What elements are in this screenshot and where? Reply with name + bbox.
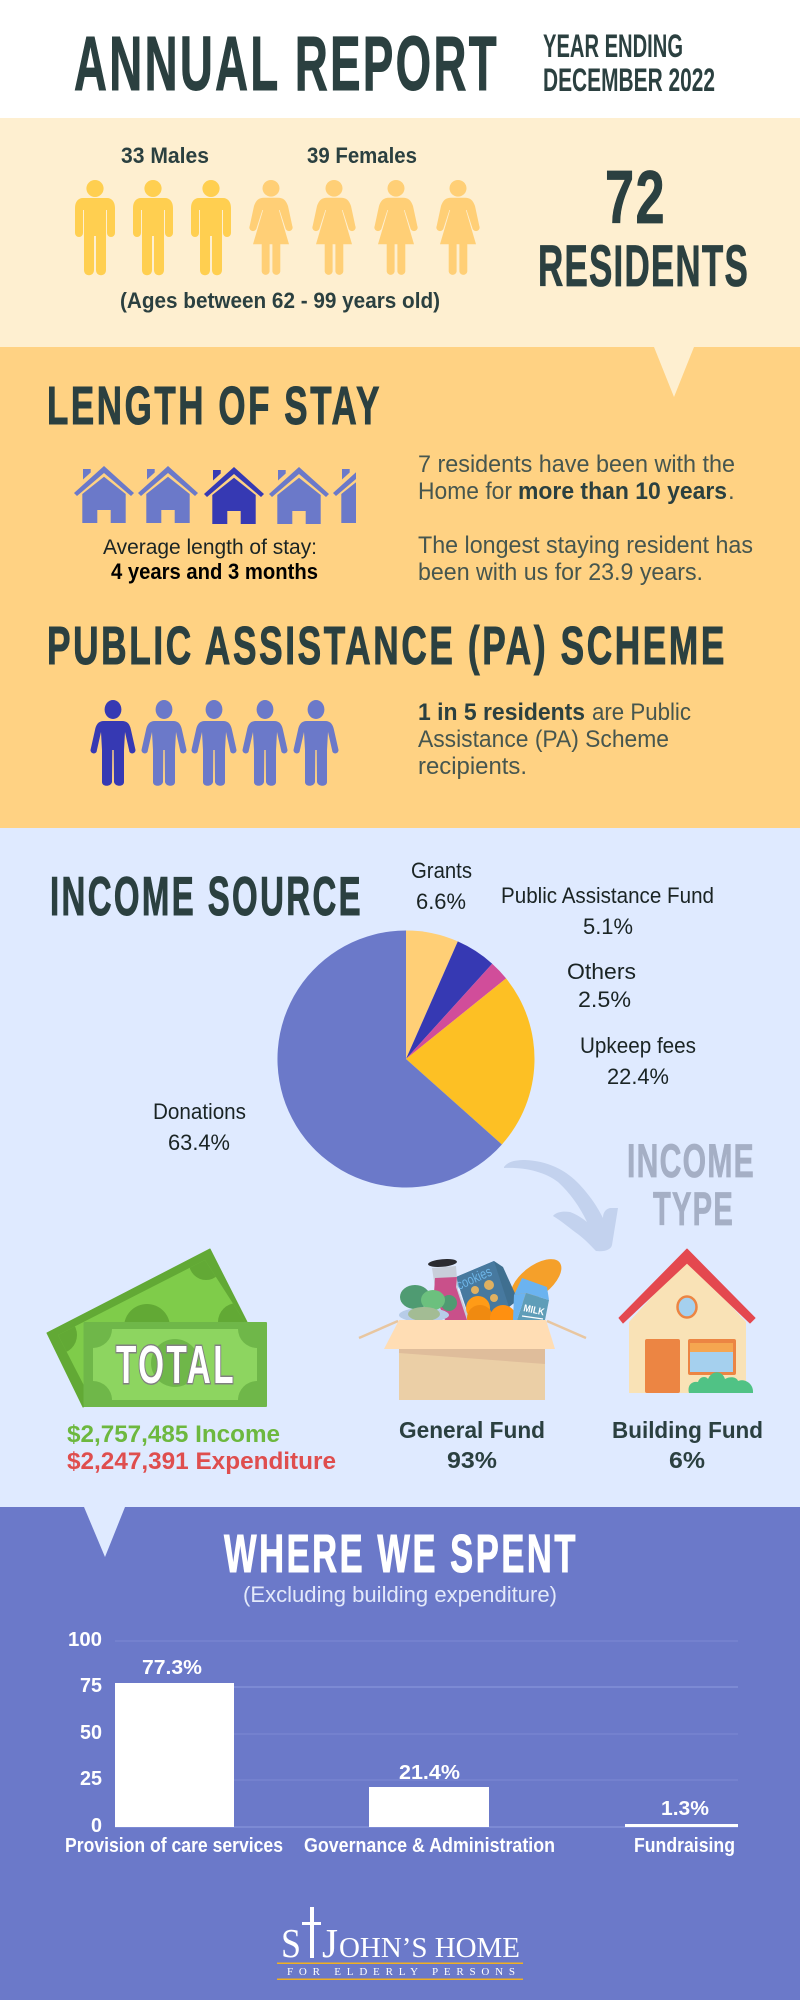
subtitle: year ending line: YEAR ENDING bbox=[543, 28, 683, 64]
value labels bbox=[142, 1657, 709, 1820]
panel: income bbox=[0, 828, 800, 1507]
value labels: 21.4% bbox=[399, 1762, 460, 1784]
text block: PA recipients: 1 in 5 residents bbox=[418, 699, 585, 726]
bar: governance and administration bbox=[369, 1787, 489, 1827]
category labels bbox=[65, 1835, 735, 1857]
label: females: 39 Females bbox=[307, 143, 417, 168]
label: building fund: Building Fund bbox=[612, 1417, 763, 1443]
category labels: Governance & Administration bbox=[304, 1835, 555, 1857]
value labels: 77.3% bbox=[142, 1657, 202, 1679]
text block: long stayers bbox=[418, 451, 735, 505]
text block: PA recipients: recipients. bbox=[418, 753, 527, 780]
pie label: others: Others bbox=[567, 959, 636, 984]
text block: long stayers: . bbox=[728, 478, 735, 505]
label: building fund: 6% bbox=[669, 1447, 705, 1473]
pointer: income callout bbox=[84, 1507, 125, 1557]
title: ANNUAL REPORT bbox=[74, 21, 499, 107]
heading: where we spent: WHERE WE SPENT bbox=[224, 1524, 578, 1584]
axis labels: 50 bbox=[80, 1722, 102, 1744]
text block: PA recipients bbox=[418, 699, 691, 780]
heading: income type: TYPE bbox=[653, 1182, 734, 1235]
stat: average stay value: 4 years and 3 months bbox=[111, 559, 318, 584]
pie label: upkeep fees bbox=[580, 1033, 696, 1089]
icon: banknotes labelled total bbox=[46, 1248, 267, 1408]
pie label: grants bbox=[411, 858, 472, 914]
pie label: others bbox=[567, 959, 636, 1012]
logo: St John's Home: OHN’S HOME bbox=[339, 1932, 520, 1964]
category labels: Provision of care services bbox=[65, 1835, 283, 1857]
text: age range: (Ages between 62 - 99 years old) bbox=[120, 288, 440, 313]
icons: row of houses bbox=[74, 466, 356, 524]
text block: longest staying resident: The longest staying resident has bbox=[418, 532, 753, 559]
icons: female figures bbox=[249, 180, 480, 275]
text block: longest staying resident bbox=[418, 532, 753, 586]
axis labels: 75 bbox=[80, 1675, 102, 1697]
axis labels: 25 bbox=[80, 1768, 102, 1790]
icons: five people, one highlighted bbox=[90, 700, 339, 786]
label: general fund: 93% bbox=[447, 1447, 497, 1473]
logo: St John's Home: J bbox=[322, 1920, 338, 1966]
text block: long stayers: Home for bbox=[418, 478, 512, 505]
axis labels: 100 bbox=[68, 1629, 102, 1651]
icon: house bbox=[619, 1249, 755, 1393]
label: building fund bbox=[612, 1417, 763, 1473]
icon: grocery box bbox=[359, 1251, 586, 1400]
arrow: to income type bbox=[504, 1160, 618, 1251]
icon: grocery box: MILK bbox=[522, 1303, 546, 1318]
pie label: others: 2.5% bbox=[578, 987, 631, 1012]
pie label: grants: Grants bbox=[411, 858, 472, 883]
heading: income source: INCOME SOURCE bbox=[50, 865, 363, 927]
pie label: donations bbox=[153, 1099, 246, 1155]
bar: fundraising bbox=[625, 1824, 738, 1827]
logo: St John's Home bbox=[277, 1907, 523, 1980]
pie label: public assistance fund: Public Assistance Fund bbox=[501, 883, 714, 908]
subheading: excluding building expenditure: (Excluding building expenditure) bbox=[243, 1582, 557, 1607]
pie label: donations: Donations bbox=[153, 1099, 246, 1124]
text block: longest staying resident: been with us for 23.9 years. bbox=[418, 559, 703, 586]
panel: where we spent bbox=[0, 1507, 800, 2000]
label: general fund: General Fund bbox=[399, 1417, 545, 1443]
text block: long stayers: more than 10 years bbox=[518, 478, 727, 505]
text: average length of stay: Average length of stay: bbox=[103, 536, 317, 559]
label: males: 33 Males bbox=[121, 143, 209, 168]
logo: St John's Home: S bbox=[281, 1920, 301, 1966]
pie chart: income source bbox=[277, 930, 534, 1188]
heading: length of stay: LENGTH OF STAY bbox=[47, 376, 382, 436]
heading: income type bbox=[627, 1134, 755, 1235]
text block: long stayers: 7 residents have been with the bbox=[418, 451, 735, 478]
axis labels bbox=[68, 1629, 102, 1837]
subtitle: date line: DECEMBER 2022 bbox=[543, 62, 715, 98]
icons: male figures bbox=[75, 180, 231, 275]
text: total: TOTAL bbox=[116, 1335, 236, 1395]
category labels: Fundraising bbox=[634, 1835, 735, 1857]
text block: PA recipients: are Public bbox=[592, 699, 691, 726]
header: annual report title bbox=[0, 0, 800, 118]
panel: residents bbox=[0, 118, 800, 347]
label: general fund bbox=[399, 1417, 545, 1473]
pie label: upkeep fees: Upkeep fees bbox=[580, 1033, 696, 1058]
pie label: public assistance fund: 5.1% bbox=[583, 914, 633, 939]
pie label: donations: 63.4% bbox=[168, 1130, 230, 1155]
pie label: grants: 6.6% bbox=[416, 889, 466, 914]
text block: PA recipients: Assistance (PA) Scheme bbox=[418, 726, 669, 753]
logo: St John's Home: FOR ELDERLY PERSONS bbox=[287, 1966, 515, 1978]
stat: total income: $2,757,485 Income bbox=[67, 1421, 280, 1448]
stat: total expenditure: $2,247,391 Expenditure bbox=[67, 1448, 336, 1475]
pointer: residents callout bbox=[654, 347, 694, 397]
icon: grocery box: cookies bbox=[454, 1263, 494, 1293]
bar: provision of care services bbox=[115, 1683, 234, 1827]
pie label: public assistance fund bbox=[501, 883, 714, 939]
bar chart: spending breakdown bbox=[65, 1629, 738, 1857]
axis labels: 0 bbox=[91, 1815, 102, 1837]
stat: number of residents: 72 bbox=[605, 155, 666, 239]
value labels: 1.3% bbox=[661, 1798, 709, 1820]
panel: length of stay and PA scheme bbox=[0, 347, 800, 828]
pie label: upkeep fees: 22.4% bbox=[607, 1064, 669, 1089]
